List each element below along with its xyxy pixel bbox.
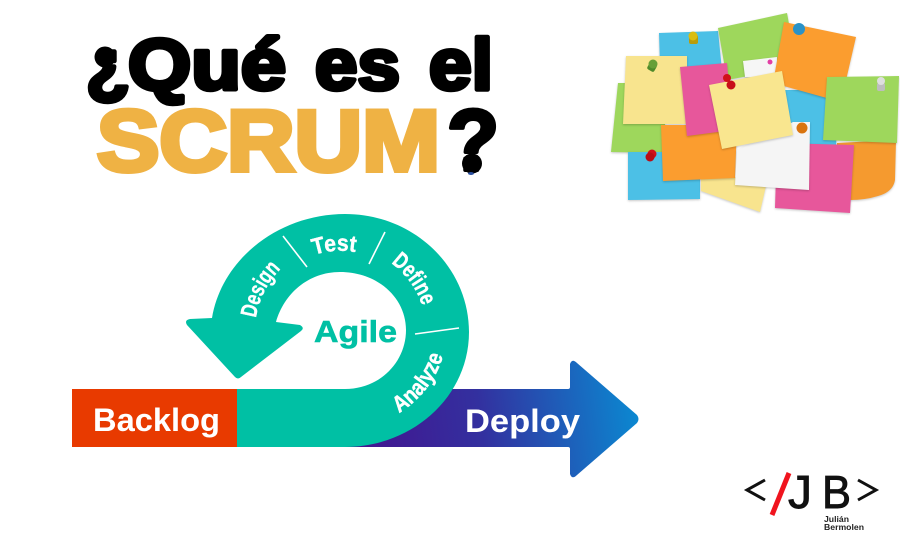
title line 1: el xyxy=(429,26,493,106)
label: Design: Design xyxy=(240,262,280,318)
logo letters JB xyxy=(788,466,851,518)
arc labels xyxy=(240,236,442,414)
title: ¿Qué es el SCRUM? xyxy=(86,26,499,190)
logo letters JB: B xyxy=(822,466,851,518)
title question mark: ? xyxy=(447,93,499,189)
block: Backlog xyxy=(72,389,237,447)
label: Test: Test xyxy=(310,236,357,254)
logo chevron left xyxy=(747,480,765,500)
divider lines xyxy=(283,232,459,334)
title line 1: Qué xyxy=(128,26,286,106)
illustration: sticky notes collage xyxy=(611,13,899,213)
title line 1: ¿ xyxy=(86,26,130,106)
logo letters JB: J xyxy=(788,466,812,518)
title word: SCRUM: SCRUM xyxy=(97,94,440,190)
logo name xyxy=(824,515,864,532)
label: Analyze: Analyze xyxy=(394,354,442,414)
arrow: Deploy xyxy=(345,361,638,477)
logo chevron right xyxy=(858,480,876,500)
logo name: Bermolen xyxy=(824,523,864,532)
question mark dot xyxy=(462,154,482,174)
inverted question mark dot xyxy=(94,46,116,68)
title line 1: es xyxy=(315,26,400,106)
label: Backlog: Backlog xyxy=(93,402,220,438)
logo slash xyxy=(772,473,789,515)
label: Agile: Agile xyxy=(314,314,397,349)
logo: Julián Bermolen xyxy=(747,466,876,532)
label: Define: Define xyxy=(392,251,433,304)
logo name: Julián xyxy=(824,515,849,524)
pins xyxy=(646,23,885,162)
agile loop arrow xyxy=(186,214,469,447)
label: Deploy: Deploy xyxy=(465,403,580,439)
